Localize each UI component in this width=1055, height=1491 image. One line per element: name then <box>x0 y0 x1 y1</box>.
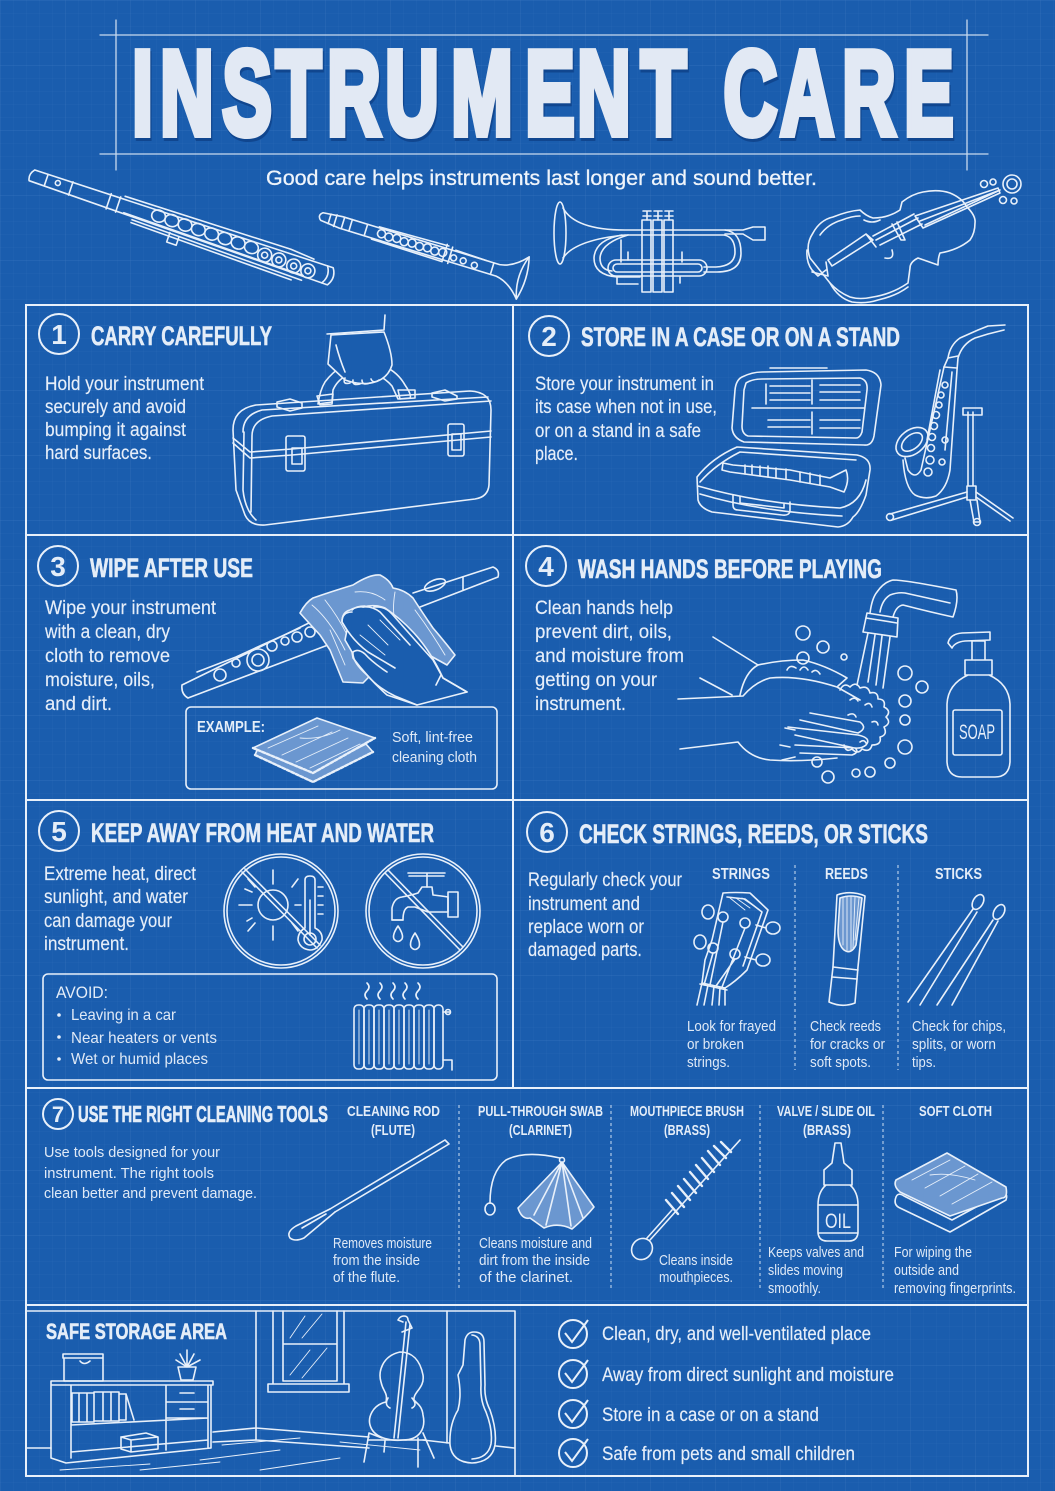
body text <box>528 870 683 961</box>
column: strings: or broken <box>687 1037 744 1053</box>
check item 4: Safe from pets and small children <box>602 1444 855 1465</box>
column: sticks <box>908 866 1007 1071</box>
body text: moisture, oils, <box>45 670 155 691</box>
heading: WIPE AFTER USE <box>90 553 253 583</box>
body text: prevent dirt, oils, <box>535 622 672 643</box>
heading: CARRY CAREFULLY <box>91 321 272 351</box>
check item 2: Away from direct sunlight and moisture <box>602 1365 894 1386</box>
body text <box>45 374 205 464</box>
column: pull-through swab: of the clarinet. <box>479 1270 573 1286</box>
step number 5 <box>39 811 79 851</box>
step number 6 <box>527 812 567 852</box>
body text: and moisture from <box>535 646 684 667</box>
icon: oil bottle: OIL <box>825 1210 851 1233</box>
panel: safe storage area <box>26 1311 515 1476</box>
icon: clarinet <box>313 195 532 300</box>
body text: instrument. The right tools <box>44 1166 214 1182</box>
icon: flute <box>24 162 337 296</box>
panel: 1 carry carefully <box>39 314 491 525</box>
step number 1 <box>39 314 79 354</box>
check item 4 <box>559 1439 855 1467</box>
column: reeds: soft spots. <box>810 1055 871 1071</box>
icon: drumsticks <box>908 893 1007 1005</box>
frame: panel grid <box>26 305 1028 1476</box>
icon: mouthpiece brush <box>627 1140 740 1264</box>
column: sticks: splits, or worn <box>912 1037 996 1053</box>
icon: soap bottle <box>947 632 1010 777</box>
step number 7 <box>43 1099 73 1129</box>
title: INSTRUMENT CARE <box>132 26 953 159</box>
icon: hand carrying case <box>233 315 491 525</box>
step number 2 <box>529 316 569 356</box>
body text: instrument. <box>535 694 626 715</box>
column: reeds: Check reeds <box>810 1019 881 1035</box>
step number 4 <box>526 546 566 586</box>
column: cleaning rod: of the flute. <box>333 1270 400 1286</box>
callout: avoid list: Leaving in a car <box>71 1007 177 1024</box>
icon: guitar headstock <box>694 892 780 1005</box>
column: strings: strings. <box>687 1055 730 1071</box>
column: mouthpiece brush: mouthpieces. <box>659 1270 733 1286</box>
icon: no water <box>366 854 480 968</box>
body text: bumping it against <box>45 420 187 441</box>
callout: avoid list: Near heaters or vents <box>71 1030 217 1047</box>
panel: 3 wipe after use <box>38 546 498 789</box>
column: valve / slide oil: Keeps valves and <box>768 1245 864 1261</box>
icon: swab <box>485 1154 594 1229</box>
step number 4: 4 <box>538 551 554 582</box>
body text <box>44 1145 257 1202</box>
body text: its case when not in use, <box>535 397 717 418</box>
callout: avoid list: Wet or humid places <box>71 1051 208 1068</box>
check item 3 <box>559 1400 819 1428</box>
panel: 2 store in a case or on a stand <box>529 316 1013 527</box>
body text: sunlight, and water <box>44 887 189 908</box>
column: sticks: tips. <box>912 1055 936 1071</box>
column: pull-through swab: dirt from the inside <box>479 1253 590 1269</box>
column: reeds: REEDS <box>825 866 868 883</box>
column: soft cloth <box>894 1103 1016 1297</box>
column: cleaning rod <box>289 1103 449 1286</box>
icon: cleaning rod <box>289 1140 449 1240</box>
check item 1: Clean, dry, and well-ventilated place <box>602 1324 871 1345</box>
column: mouthpiece brush: Cleans inside <box>659 1253 733 1269</box>
icon: folded cloth <box>253 718 375 782</box>
column: soft cloth: SOFT CLOTH <box>919 1103 992 1120</box>
body text: Extreme heat, direct <box>44 864 197 885</box>
check item 2 <box>559 1360 894 1388</box>
column: soft cloth: removing fingerprints. <box>894 1281 1016 1297</box>
column: cleaning rod: CLEANING ROD <box>347 1103 440 1120</box>
column: valve / slide oil: VALVE / SLIDE OIL <box>777 1103 875 1120</box>
column: mouthpiece brush: MOUTHPIECE BRUSH <box>630 1103 744 1120</box>
body text: and dirt. <box>45 694 112 715</box>
body text: or on a stand in a safe <box>535 421 701 442</box>
callout: example cloth: Soft, lint-free <box>392 730 473 746</box>
icon: no sun or heat <box>224 854 338 968</box>
heading: WASH HANDS BEFORE PLAYING <box>578 554 882 584</box>
subtitle: Good care helps instruments last longer and sound better. <box>266 167 817 190</box>
icon: folded soft cloth <box>895 1153 1007 1232</box>
column: valve / slide oil: smoothly. <box>768 1281 821 1297</box>
step number 7: 7 <box>52 1102 64 1127</box>
step number 6: 6 <box>539 817 555 848</box>
check item 1 <box>559 1320 871 1348</box>
body text: Store your instrument in <box>535 374 714 395</box>
body text <box>44 598 217 715</box>
body text: damaged parts. <box>528 940 642 961</box>
body text: instrument and <box>528 894 640 915</box>
column: pull-through swab: Cleans moisture and <box>479 1236 592 1252</box>
column: mouthpiece brush <box>627 1103 744 1286</box>
heading: STORE IN A CASE OR ON A STAND <box>581 322 900 352</box>
body text: securely and avoid <box>45 397 186 418</box>
column: cleaning rod: Removes moisture <box>333 1236 432 1252</box>
illustration: room with shelf, window, cello and case <box>26 1311 514 1470</box>
panel: 4 wash hands before playing <box>526 546 1010 783</box>
step number 3 <box>38 546 78 586</box>
column: strings <box>687 866 780 1071</box>
column: soft cloth: For wiping the <box>894 1245 972 1261</box>
column: valve / slide oil: slides moving <box>768 1263 843 1279</box>
icon: saxophone on stand <box>886 325 1013 526</box>
callout: example cloth <box>186 707 497 789</box>
column: pull-through swab: (CLARINET) <box>509 1122 572 1139</box>
body text: can damage your <box>44 911 173 932</box>
body text: Clean hands help <box>535 598 673 619</box>
column: pull-through swab <box>478 1103 603 1286</box>
heading: SAFE STORAGE AREA <box>46 1319 227 1344</box>
panel: 6 check strings, reeds, or sticks <box>527 812 1007 1071</box>
body text <box>535 598 684 715</box>
callout: example cloth: cleaning cloth <box>392 750 477 766</box>
check item 3: Store in a case or on a stand <box>602 1405 819 1426</box>
column: valve / slide oil: (BRASS) <box>803 1122 851 1139</box>
column: soft cloth: outside and <box>894 1263 959 1279</box>
column: mouthpiece brush: (BRASS) <box>664 1122 710 1139</box>
column: reeds: for cracks or <box>810 1037 885 1053</box>
panel: 7 use the right cleaning tools <box>43 1099 1016 1297</box>
column: sticks: STICKS <box>935 866 982 883</box>
checklist <box>559 1320 894 1467</box>
body text: Wipe your instrument <box>45 598 217 619</box>
column: valve / slide oil <box>768 1103 875 1297</box>
step number 3: 3 <box>50 551 66 582</box>
callout: avoid list <box>43 974 497 1080</box>
body text: clean better and prevent damage. <box>44 1186 257 1202</box>
column: pull-through swab: PULL-THROUGH SWAB <box>478 1103 603 1120</box>
body text: hard surfaces. <box>45 443 152 464</box>
icon: washing hands under faucet <box>678 580 957 783</box>
callout: example cloth: EXAMPLE: <box>197 719 265 736</box>
step number 1: 1 <box>51 319 67 350</box>
body text: cloth to remove <box>45 646 170 667</box>
icon: oil bottle <box>818 1143 858 1241</box>
body text: place. <box>535 444 578 465</box>
column: strings: STRINGS <box>712 866 770 883</box>
body text: replace worn or <box>528 917 645 938</box>
column: strings: Look for frayed <box>687 1019 776 1035</box>
column: sticks: Check for chips, <box>912 1019 1006 1035</box>
body text: getting on your <box>535 670 658 691</box>
icon: soap bottle: SOAP <box>959 721 995 744</box>
icon: radiator with heat <box>354 983 452 1070</box>
body text: Use tools designed for your <box>44 1145 220 1161</box>
body text: Hold your instrument <box>45 374 205 395</box>
icon: violin <box>807 175 1021 303</box>
body text: Regularly check your <box>528 870 683 891</box>
icon: hand wiping flute with cloth <box>182 567 498 705</box>
column: reeds <box>810 866 885 1071</box>
heading: KEEP AWAY FROM HEAT AND WATER <box>91 818 434 848</box>
body text <box>535 374 717 465</box>
body text: with a clean, dry <box>44 622 170 643</box>
icon: reed <box>829 893 865 1005</box>
step number 2: 2 <box>541 321 557 352</box>
column: cleaning rod: (FLUTE) <box>371 1122 415 1139</box>
panel: 5 keep away from heat and water <box>26 811 1016 1476</box>
heading: USE THE RIGHT CLEANING TOOLS <box>78 1101 328 1127</box>
body text: instrument. <box>44 934 129 955</box>
step number 5: 5 <box>51 816 67 847</box>
body text <box>44 864 197 955</box>
icon: open case with clarinet <box>697 368 881 527</box>
callout: avoid list: AVOID: <box>56 983 108 1002</box>
column: cleaning rod: from the inside <box>333 1253 420 1269</box>
icon: trumpet <box>554 202 765 292</box>
